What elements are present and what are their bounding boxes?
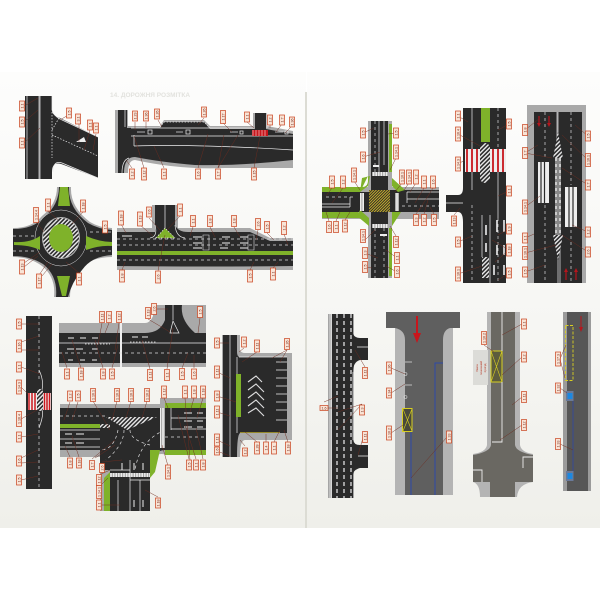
reference labels: 1.7: [586, 182, 590, 188]
reference labels: 1.6: [361, 154, 365, 160]
chevrons: [248, 376, 264, 416]
reference labels: 1.2: [522, 354, 526, 360]
reference labels: 1.6: [196, 172, 200, 176]
reference labels: 1.18: [77, 460, 81, 466]
reference labels: 1.5: [17, 478, 21, 482]
reference labels: 1.8: [215, 394, 219, 398]
reference labels: 1.26: [202, 108, 206, 116]
faded heading: 14. ДОРОЖНЯ РОЗМІТКА: [110, 92, 190, 99]
reference labels: 1.6: [322, 406, 326, 410]
reference labels: 1.5: [187, 462, 191, 468]
reference labels: 1.12: [162, 388, 166, 396]
reference labels: 1.14.1: [523, 202, 527, 212]
reference labels: 1.5: [20, 120, 24, 124]
reference labels: 1.5: [586, 134, 590, 138]
reference labels: 1.12: [394, 238, 398, 246]
reference labels: 1.6: [192, 372, 196, 376]
diagram: road with parking bays: [563, 312, 591, 491]
diagram: road with side junction: [59, 305, 206, 367]
reference labels: 1.11: [215, 409, 219, 415]
reference labels: 1.16.4: [456, 129, 460, 139]
reference labels: 1.5: [330, 180, 334, 184]
reference labels: 1.2: [130, 172, 134, 176]
reference labels: 1.10.2: [482, 333, 486, 343]
reference labels: 2.6: [156, 274, 160, 280]
reference labels: 1.13: [146, 310, 150, 316]
reference labels: 1.5: [456, 240, 460, 244]
red crossing: [252, 130, 268, 136]
reference labels: 1.2: [243, 450, 247, 454]
reference labels: 1.1: [46, 202, 50, 208]
reference labels: 1.1: [522, 322, 526, 326]
reference labels: 1.18: [507, 246, 511, 254]
diagram: T junction diagonal: [25, 96, 98, 179]
reference labels: 1.14.3: [456, 159, 460, 169]
icon: red arrows: [539, 116, 576, 280]
central island: [49, 224, 73, 252]
reference labels: 1.33: [447, 434, 451, 440]
reference labels: 1.6: [327, 224, 331, 230]
diagram: road with side turnings: [328, 314, 368, 498]
reference labels: 1.14.1: [394, 147, 398, 157]
sign text: Увага: [475, 364, 479, 372]
reference labels: 1.5: [215, 340, 219, 346]
reference labels: 1.18: [119, 214, 123, 222]
reference labels: 1.5: [110, 372, 114, 376]
reference labels: 1.12: [343, 222, 347, 230]
reference labels: 1.32: [556, 384, 560, 392]
reference labels: [16, 101, 590, 510]
reference labels: 1.36: [290, 118, 294, 126]
arrows: [137, 130, 288, 134]
parking bays: [160, 122, 210, 128]
diagram: vertical road with crossing island: [26, 316, 52, 489]
reference labels: 1.17: [221, 114, 225, 120]
reference labels: 1.5: [507, 270, 511, 276]
reference labels: 1.6: [395, 270, 399, 274]
reference labels: 1.1: [165, 372, 169, 378]
reference labels: 1.11: [215, 369, 219, 375]
diagram: road with red crossing and island: [446, 108, 506, 283]
reference labels: 1.5: [432, 218, 436, 222]
reference labels: 1.11: [100, 314, 104, 320]
reference labels: 1.8: [120, 274, 124, 278]
reference labels: 1.5: [248, 274, 252, 278]
reference labels: 1.26: [285, 340, 289, 348]
reference labels: 1.6: [17, 458, 21, 464]
reference labels: 1.14.1: [166, 467, 170, 477]
reference labels: 1.3: [360, 408, 364, 412]
reference labels: 1.1: [20, 140, 24, 146]
reference labels: 1.2: [242, 340, 246, 344]
reference labels: 1.1: [507, 188, 511, 194]
reference labels: 1.1: [271, 272, 275, 276]
reference labels: 1.1: [94, 126, 98, 130]
reference labels: 1.2: [107, 314, 111, 320]
reference labels: 1.8: [68, 460, 72, 466]
reference labels: 1.5: [180, 372, 184, 376]
reference labels: 1.1: [162, 172, 166, 176]
reference labels: 1.8: [192, 390, 196, 394]
right page: [307, 72, 600, 528]
reference labels: 1.1: [97, 502, 101, 508]
reference labels: 1.14.1: [352, 170, 356, 180]
reference labels: 1.5: [265, 224, 269, 230]
reference labels: 1.5: [394, 130, 398, 136]
hatched diamonds: [553, 132, 563, 260]
red and white crossing: [465, 149, 481, 172]
green verges: [322, 124, 405, 276]
reference labels: 1.5: [507, 122, 511, 126]
diagram: dual carriageway with side road: [117, 205, 293, 270]
reference labels: 1.12: [522, 422, 526, 428]
reference labels: 1.11: [363, 370, 367, 376]
reference labels: 1.12: [142, 170, 146, 178]
reference labels: 3.1: [76, 116, 80, 122]
reference labels: 1.9: [507, 226, 511, 232]
reference labels: 1.5: [523, 270, 527, 274]
reference labels: 1.16: [17, 342, 21, 350]
reference labels: 1.2: [422, 218, 426, 222]
reference labels: 1.14.1: [361, 231, 365, 241]
reference labels: 1.3: [363, 250, 367, 256]
reference labels: 1.10.2: [387, 428, 391, 438]
icon: bicycle marks: [404, 372, 407, 376]
reference labels: 1.18: [79, 370, 83, 378]
reference labels: 1.14.4: [34, 210, 38, 220]
reference labels: 1.6: [431, 180, 435, 184]
reference labels: 1.16.1: [456, 269, 460, 279]
reference labels: 1.33: [556, 440, 560, 448]
reference labels: 1.5: [76, 394, 80, 398]
reference labels: 1.23: [133, 112, 137, 120]
reference labels: 1.28: [255, 444, 259, 452]
reference labels: 1.5: [67, 110, 71, 116]
reference labels: 1.2: [268, 118, 272, 122]
reference labels: 1.36: [387, 364, 391, 372]
hatched island: [37, 389, 43, 411]
reference labels: 1.17.3: [556, 354, 560, 364]
reference labels: 2.6: [256, 222, 260, 226]
reference labels: 1.10.1: [400, 172, 404, 182]
reference labels: 2.6: [152, 306, 156, 312]
reference labels: 1.14.1: [97, 487, 101, 497]
hatched island: [480, 143, 490, 183]
icon: red arrow: [416, 316, 418, 335]
reference labels: 1.5: [361, 130, 365, 136]
reference labels: 1.1: [17, 434, 21, 440]
reference labels: 1.5: [17, 322, 21, 326]
reference labels: 1.11: [255, 343, 259, 349]
reference labels: 1.7: [216, 172, 220, 176]
leader lines: [21, 98, 588, 505]
reference labels: 1.8: [523, 128, 527, 132]
reference labels: 1.1: [245, 114, 249, 120]
reference labels: 1.16.1: [91, 390, 95, 400]
diagram: road with yellow box and sign: проїзд: [483, 363, 487, 372]
reference labels: 1.13: [138, 216, 142, 222]
reference labels: 1.4: [264, 446, 268, 450]
reference labels: 1.11: [215, 437, 219, 443]
reference labels: 1.12: [117, 314, 121, 320]
icon: lane arrow: [76, 137, 86, 142]
reference labels: 1.1: [194, 462, 198, 468]
reference labels: 2.6: [147, 210, 151, 214]
reference labels: 1.11: [148, 372, 152, 378]
green strips: [60, 403, 206, 511]
reference labels: 1.1: [20, 104, 24, 108]
reference labels: 1.5: [198, 310, 202, 314]
reference labels: 1.2: [586, 230, 590, 234]
reference labels: 1.1: [183, 390, 187, 394]
reference labels: 2.6: [100, 466, 104, 470]
diagram: crossroads with yellow box: [322, 121, 439, 278]
diagram: road with yellow box and sign: пожежний: [479, 361, 483, 375]
reference labels: 1.11: [522, 394, 526, 400]
reference labels: 1.16.4: [17, 414, 21, 424]
reference labels: 1.1: [178, 208, 182, 212]
diagram: road with bike lane and crossing: [115, 110, 293, 173]
reference labels: 1.7: [523, 150, 527, 156]
reference labels: 1.5: [363, 264, 367, 270]
spine: [305, 92, 307, 528]
reference labels: 1.2: [341, 180, 345, 184]
ring: [35, 210, 87, 266]
reference labels: 1.7: [280, 118, 284, 122]
reference labels: 2.6: [586, 250, 590, 254]
splitter islands: [14, 187, 112, 296]
reference labels: 1.7: [90, 462, 94, 468]
reference labels: 1.1: [395, 256, 399, 260]
reference labels: 1.8: [201, 462, 205, 468]
reference labels: 1.14.1: [407, 172, 411, 182]
reference labels: 1.6: [215, 448, 219, 454]
reference labels: 1.8: [232, 218, 236, 224]
reference labels: 1.15: [252, 170, 256, 178]
reference labels: 1.3: [414, 218, 418, 222]
diagram: road with car park: [222, 335, 292, 457]
reference labels: 1.1: [272, 446, 276, 450]
reference labels: 1.18: [81, 202, 85, 210]
diagram: road with yellow box and sign: [473, 312, 533, 497]
reference labels: 1.1: [65, 372, 69, 376]
reference labels: 1.12: [97, 476, 101, 484]
reference labels: 1.17: [37, 278, 41, 284]
reference labels: 1.1: [77, 276, 81, 282]
icon: red arrow: [580, 316, 582, 328]
reference labels: 1.1: [422, 180, 426, 184]
reference labels: 1.5: [103, 224, 107, 230]
reference labels: 1.36: [144, 112, 148, 120]
reference labels: 1.1: [17, 364, 21, 370]
reference labels: 1.1: [191, 218, 195, 224]
reference labels: 1.2: [68, 394, 72, 398]
reference labels: 1.14.3: [17, 382, 21, 392]
red crossing: [28, 393, 37, 410]
diagram: road with blue lines and red arrow: [386, 312, 460, 495]
reference labels: 1.16.1: [129, 390, 133, 400]
reference labels: 1.18: [156, 500, 160, 506]
reference labels: 1.1: [523, 236, 527, 240]
reference labels: 1.2: [282, 226, 286, 230]
reference labels: 1.11: [363, 434, 367, 440]
reference labels: 1.8: [208, 218, 212, 224]
reference labels: 1.26: [155, 110, 159, 118]
reference labels: 1.1: [456, 114, 460, 118]
reference labels: 1.13: [20, 264, 24, 270]
reference labels: 1.2: [414, 174, 418, 180]
reference labels: 1.1: [88, 122, 92, 128]
reference labels: 1.16.2: [145, 390, 149, 400]
reference labels: 1.8: [101, 372, 105, 376]
reference labels: 1.16.1: [586, 155, 590, 165]
left page: [0, 72, 306, 528]
reference labels: 1.18: [201, 388, 205, 396]
reference labels: 1.16.1: [523, 248, 527, 258]
diagram: road with staggered crossings: [527, 105, 586, 283]
diagram: roundabout: [13, 187, 112, 297]
reference labels: 1.34: [387, 390, 391, 396]
reference labels: 1.16.3: [115, 390, 119, 400]
diagram: large junction with green medians: [60, 398, 206, 511]
reference labels: 1.18: [286, 444, 290, 452]
reference labels: 1.1: [334, 224, 338, 230]
crossing stripes: [538, 162, 549, 203]
reference labels: 1.13: [452, 218, 456, 224]
